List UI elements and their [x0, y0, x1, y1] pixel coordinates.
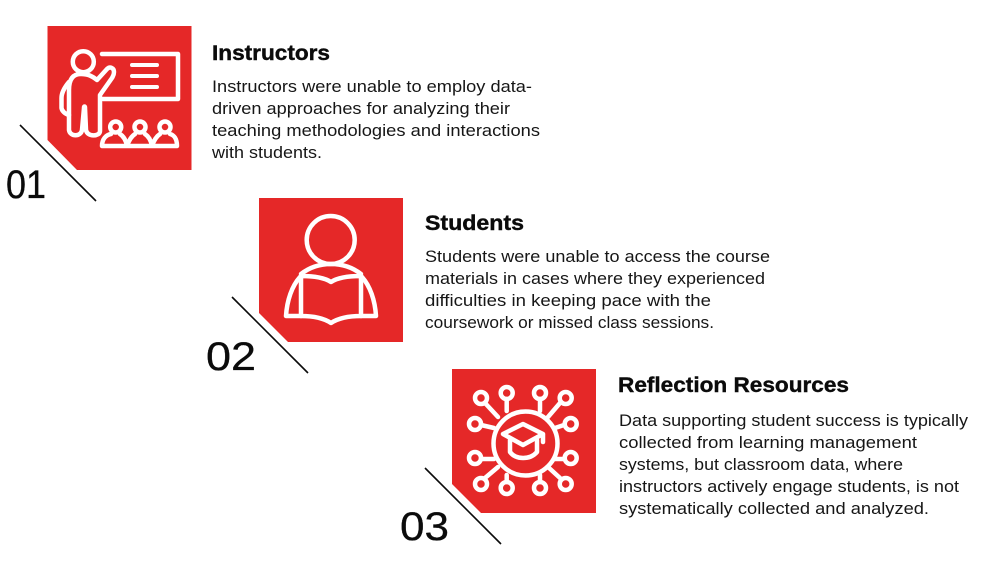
text block: students: [425, 247, 770, 332]
text block: students: coursework or missed class sessions.: [425, 313, 714, 332]
text block: reflection resources: systematically collected and analyzed.: [619, 499, 929, 518]
text block: reflection resources: [619, 411, 969, 518]
panel: reflection resources: [400, 369, 969, 549]
diagonal line 2: [232, 297, 308, 373]
heading: Students: Students: [425, 212, 524, 235]
diagonal line 3: [425, 468, 501, 544]
panel: students: [206, 198, 770, 379]
text block: reflection resources: Data supporting student success is typically: [619, 411, 969, 430]
text block: instructors: driven approaches for analyzing their: [212, 99, 510, 118]
number 02: 02: [206, 335, 256, 379]
icon: graduation cap network: [469, 387, 577, 494]
text block: students: materials in cases where they experienced: [425, 269, 765, 288]
icon: student reading a book: [286, 216, 376, 323]
text block: instructors: teaching methodologies and interactions: [212, 121, 540, 140]
icon: instructor at board with students: [62, 51, 178, 146]
text block: reflection resources: instructors actively engage students, is not: [619, 477, 959, 496]
panel: instructors: [6, 26, 540, 207]
number 01: 01: [6, 163, 46, 207]
red icon tile 1: [48, 26, 192, 170]
text block: instructors: with students.: [211, 143, 322, 162]
heading: Reflection Resources: Reflection Resources: [618, 374, 849, 397]
text block: reflection resources: systems, but classroom data, where: [619, 455, 903, 474]
number 03: 03: [400, 505, 449, 549]
diagonal line 1: [20, 125, 96, 201]
red icon tile 3: [452, 369, 596, 513]
text block: reflection resources: collected from learning management: [619, 433, 917, 452]
text block: students: difficulties in keeping pace with the: [425, 291, 711, 310]
heading: Instructors: Instructors: [212, 42, 330, 65]
text block: instructors: [211, 77, 540, 162]
text block: instructors: Instructors were unable to employ data-: [212, 77, 532, 96]
red icon tile 2: [259, 198, 403, 342]
text block: students: Students were unable to access the course: [425, 247, 770, 266]
